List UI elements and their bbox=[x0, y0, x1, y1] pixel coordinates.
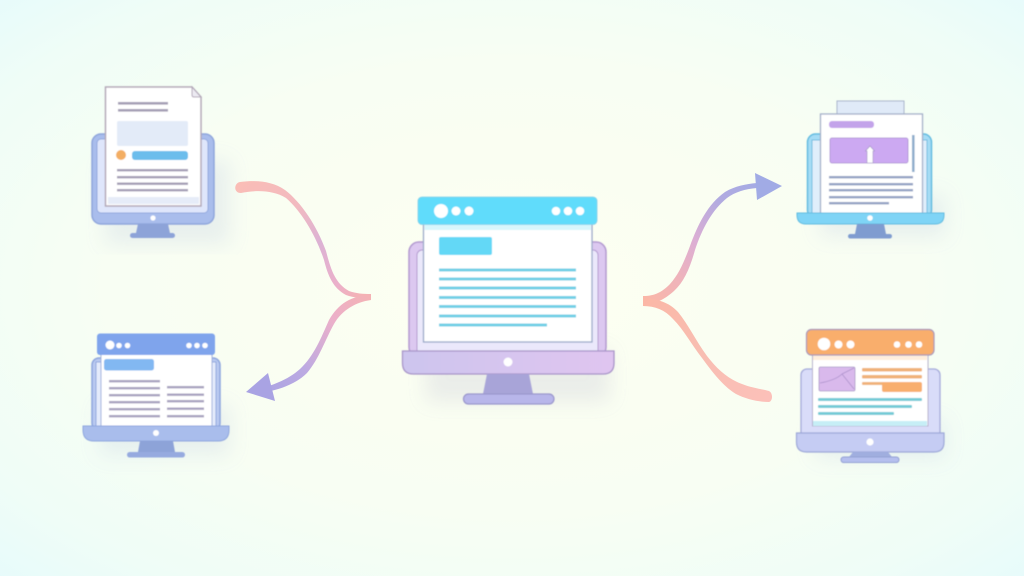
icon: browser on monitor, bottom left bbox=[83, 334, 230, 458]
document page bbox=[820, 114, 922, 214]
central title bar bbox=[418, 197, 597, 224]
image placeholder bbox=[819, 367, 855, 391]
browser title bar bbox=[97, 334, 215, 355]
browser page bbox=[812, 352, 928, 426]
icon: document with image on monitor, top right bbox=[797, 101, 945, 238]
central page bbox=[424, 222, 592, 342]
arrow: centre junction to top right icon bbox=[643, 173, 782, 305]
browser page bbox=[101, 354, 212, 426]
icon: browser with image on monitor, bottom right bbox=[796, 330, 945, 462]
icon: document on monitor, top left bbox=[92, 87, 230, 245]
document page bbox=[106, 87, 201, 206]
browser title bar bbox=[806, 330, 934, 355]
arrow: top left icon to centre junction bbox=[235, 181, 371, 298]
arrow: centre junction to bottom left icon bbox=[246, 295, 371, 401]
arrow: centre junction to bottom right icon bbox=[643, 298, 772, 402]
icon: central browser on monitor bbox=[402, 197, 614, 404]
